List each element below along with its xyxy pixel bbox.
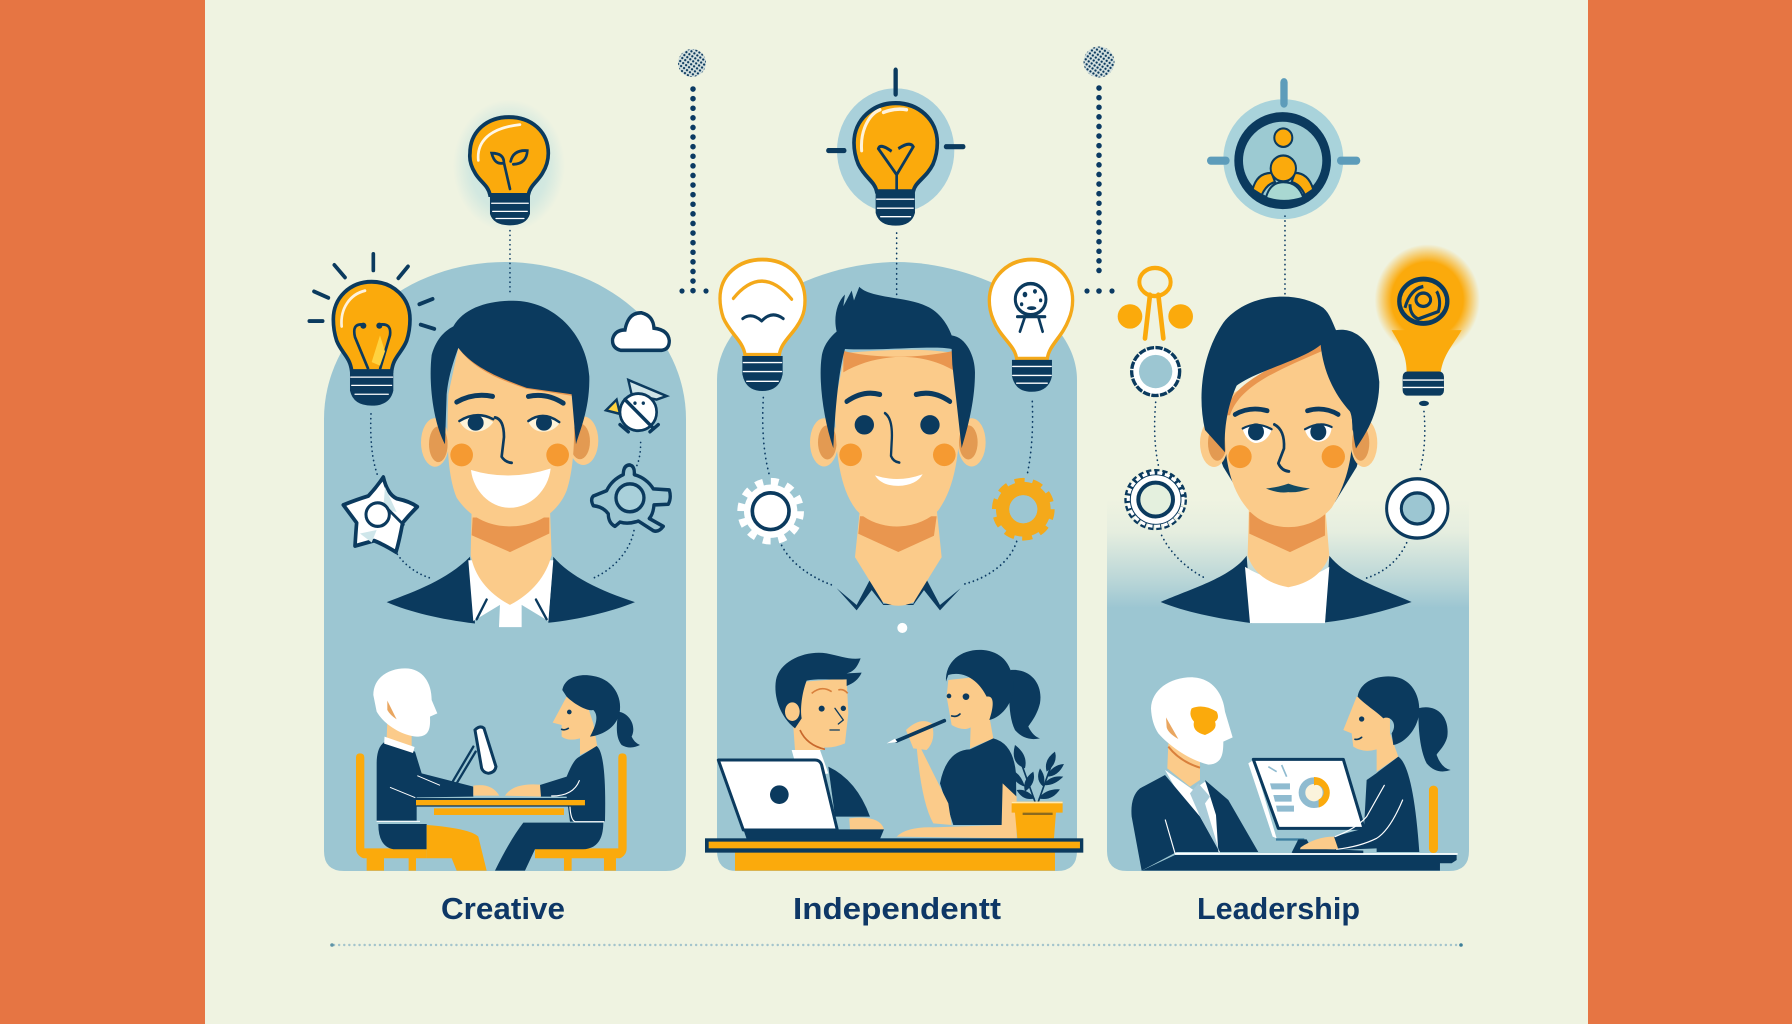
device on stand [452,727,496,783]
table [416,798,585,815]
woman seated [495,675,640,871]
label: Independentt: Independentt [793,891,1001,926]
panel: creative background [324,262,686,871]
icon: right white bulb [989,260,1073,392]
woman with pen [887,650,1040,838]
jacket [387,557,635,624]
ears [810,418,986,466]
eyes and brows [1235,409,1338,443]
icon: outline gear [592,465,670,531]
neck [855,508,942,606]
nose [885,413,899,463]
neck shadow [472,517,549,552]
connector dots sides [763,398,1033,585]
connector dots top [507,231,512,296]
face [835,350,960,526]
icon: target ring [1387,479,1448,538]
hair [1201,297,1379,452]
connector: second dotted line with halftone node [1084,46,1115,294]
desk [1142,854,1458,871]
scene: independent meeting [705,650,1083,871]
connector dots left [1155,402,1205,578]
icon: top bulb in circle [828,70,963,226]
icon: leadership target [1211,82,1357,219]
figure: smiling man bust [387,301,635,627]
figure: smiling man with quiff [810,287,986,633]
laptop [718,760,884,839]
scene: leadership meeting [1131,676,1458,871]
icon: top light bulb [453,100,565,232]
panel: independent background [717,262,1077,871]
connector dots right [593,442,641,578]
collar [837,577,961,610]
neck shadow [1249,512,1325,552]
creative portrait group [309,100,670,627]
icon: star gear [343,477,417,552]
label: Leadership: Leadership [1197,891,1360,926]
dotted footer line [330,943,1463,947]
cheeks [1228,445,1345,468]
chairs [356,753,627,871]
independent portrait group [720,70,1073,633]
icon: ring gear [1128,472,1184,527]
label: Creative: Creative [441,891,565,926]
icon: glowing bulb [1375,244,1480,406]
face [1225,345,1352,527]
leadership portrait group [1118,82,1480,623]
eyes and brows [457,395,563,432]
face [447,348,574,526]
neck shadow [858,516,937,552]
shirt [468,560,553,627]
connector dots top [1282,216,1287,295]
shirt [1245,567,1329,623]
shirt button [897,623,907,633]
mouth [1266,484,1310,492]
connector dots left [371,414,431,578]
desk [705,838,1083,871]
icon: cloud [613,313,669,350]
smile [875,474,923,486]
cheeks [450,444,569,466]
icon: left light bulb with rays [309,254,434,406]
icon: left white bulb [720,260,805,391]
plant pot [1010,745,1064,838]
scene: creative meeting [356,668,640,871]
icon: white gear [742,483,799,540]
nose [1274,424,1289,471]
monitor [1248,759,1364,853]
icon: robot badge [606,380,667,432]
smile [471,469,551,508]
man in suit [1131,677,1258,871]
connector: first dotted line with halftone node [678,49,709,294]
panel: leadership background [1107,500,1469,871]
icon: yellow key symbol [1118,268,1193,338]
neck [1248,504,1329,587]
neck [471,509,552,605]
connector dots top [894,233,899,295]
man with laptop [775,653,884,829]
nose [495,417,512,463]
ears [1200,419,1377,467]
ears [421,416,598,467]
man seated [373,668,499,871]
jacket [1161,556,1412,623]
connector dots right [1367,412,1425,578]
hair [431,301,589,444]
eyes and brows [847,393,950,435]
icon: yellow gear [997,483,1050,536]
cheeks [839,444,956,466]
woman at monitor [1300,676,1451,853]
icon: filled gear [1132,348,1180,396]
hair [821,287,975,448]
hair behind head [1207,356,1377,502]
figure: neutral woman bust [1161,297,1412,623]
